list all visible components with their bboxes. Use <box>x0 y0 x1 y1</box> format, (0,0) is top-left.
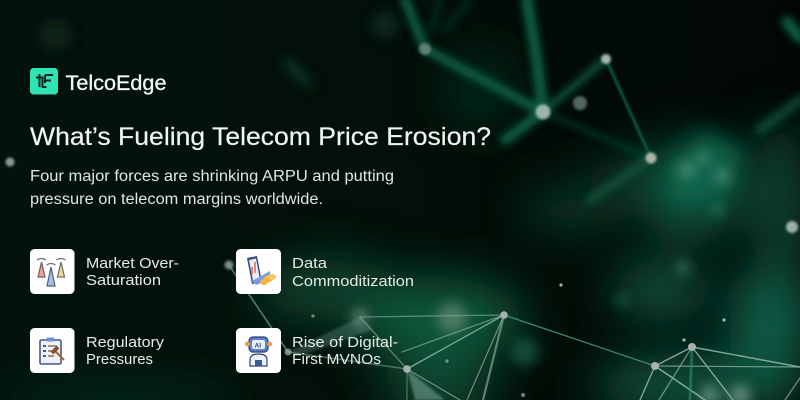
title: What’s Fueling Telecom Price Erosion? <box>30 123 491 151</box>
blurred upper network strokes <box>405 0 800 200</box>
sharp lower network lines <box>229 265 800 400</box>
subtitle: Four major forces are shrinking ARPU and putting <box>30 168 394 185</box>
label <box>292 255 414 290</box>
label <box>292 334 398 368</box>
icon: phone with chart and coins <box>236 249 281 294</box>
logo: TelcoEdge <box>30 68 166 95</box>
label: First MVNOs <box>292 351 381 368</box>
item: Market Over-Saturation <box>30 249 179 294</box>
label <box>86 334 165 368</box>
icon: cell towers <box>30 249 74 294</box>
icon: clipboard and gavel <box>30 328 74 373</box>
network nodes <box>284 283 726 397</box>
label: Commoditization <box>292 273 414 290</box>
logo wordmark: TelcoEdge <box>66 72 166 95</box>
icon: AI robot <box>236 328 281 373</box>
label <box>86 255 179 289</box>
item: Regulatory Pressures <box>30 328 165 373</box>
subtitle <box>30 168 394 208</box>
icon: AI robot: AI <box>254 342 261 350</box>
label: Regulatory <box>86 334 165 351</box>
label: Saturation <box>86 272 161 289</box>
label: Rise of Digital- <box>292 334 398 351</box>
blurred cluster mid right <box>665 130 745 200</box>
item: Rise of Digital-First MVNOs <box>236 328 398 373</box>
label: Data <box>292 255 328 272</box>
item: Data Commoditization <box>236 249 414 294</box>
label: Pressures <box>86 351 153 368</box>
logo mark <box>30 68 58 94</box>
label: Market Over- <box>86 255 179 272</box>
subtitle: pressure on telecom margins worldwide. <box>30 191 323 208</box>
